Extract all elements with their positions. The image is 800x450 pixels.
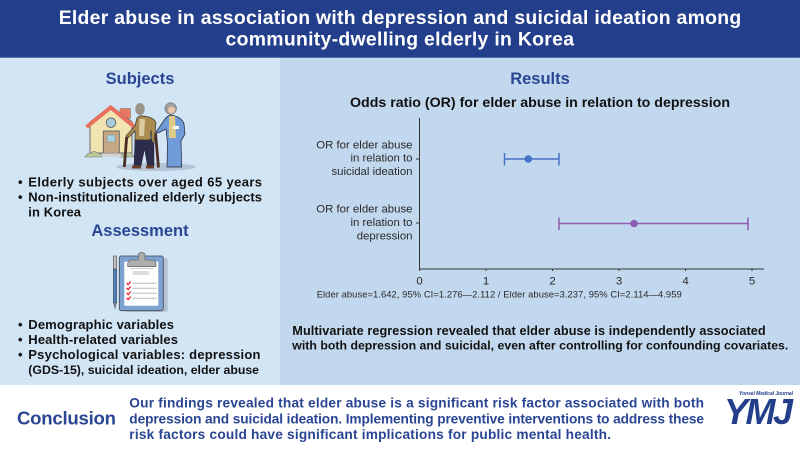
heading: results: Results [510,70,570,88]
text: assessment variables: (GDS-15), suicidal ideation, elder abuse [28,363,259,377]
row labels: in relation to [350,217,412,229]
text: subject criteria: Non-institutionalized elderly subjects [28,190,262,205]
row labels: suicidal ideation [331,166,412,178]
text: subject criteria [18,175,262,220]
row labels [316,139,412,242]
interval: suicidal ideation [504,153,559,166]
axis tick labels: 5 [749,276,755,288]
interval: depression [559,218,748,230]
chart heading: Odds ratio (OR) for elder abuse in relation to depression [350,95,730,111]
journal name: Yonsei Medical Journal [739,391,794,397]
text: assessment variables [18,318,261,377]
text: assessment variables: • [18,332,23,347]
conclusion text: Our findings revealed that elder abuse is a significant risk factor associated with both [129,396,704,411]
conclusion text: risk factors could have significant implications for public mental health. [129,427,611,442]
logo letters: YMJ [724,391,794,432]
text: regression summary: with both depression and suicidal, even after controlling for confounding covariates. [291,338,788,352]
title banner [0,0,800,58]
text: subject criteria: in Korea [28,205,82,220]
text: subject criteria: Elderly subjects over aged 65 years [28,175,262,190]
chart caption: Elder abuse=1.642, 95% CI=1.276—2.112 / Elder abuse=3.237, 95% CI=2.114—4.959 [317,289,682,300]
logo: YMJ [724,391,794,432]
text: assessment variables: • [18,347,23,362]
axis tick labels: 2 [549,276,556,288]
text: assessment variables: Psychological variables: depression [28,347,261,362]
row labels: OR for elder abuse [316,139,412,151]
heading: subjects: Subjects [106,70,174,88]
title banner: Elder abuse in association with depression and suicidal ideation among [59,7,741,29]
forest plot chart [316,118,764,300]
row labels: depression [357,230,412,242]
icon: elderly couple and house [84,102,196,171]
conclusion text: depression and suicidal ideation. Implementing preventive interventions to address these [129,412,704,426]
axis tick labels: 1 [483,276,489,288]
text: subject criteria: • [18,190,23,205]
row labels: in relation to [350,153,412,165]
conclusion text [129,396,704,442]
icon: clipboard and pencil [113,252,168,312]
axis tick labels: 3 [616,276,622,288]
row labels: OR for elder abuse [316,204,412,216]
text: assessment variables: Health-related variables [28,332,178,347]
conclusion label: Conclusion [17,407,116,428]
title banner: community-dwelling elderly in Korea [226,28,574,50]
heading: assessment: Assessment [91,222,189,240]
text: regression summary [291,324,788,352]
axis tick labels: 0 [416,276,423,288]
axis tick labels: 4 [682,276,689,288]
text: regression summary: Multivariate regression revealed that elder abuse is independently associated [292,324,766,338]
panel: results [280,58,800,385]
panel: subjects and assessment [0,58,280,385]
axis tick labels [416,276,755,288]
text: subject criteria: • [18,175,23,190]
